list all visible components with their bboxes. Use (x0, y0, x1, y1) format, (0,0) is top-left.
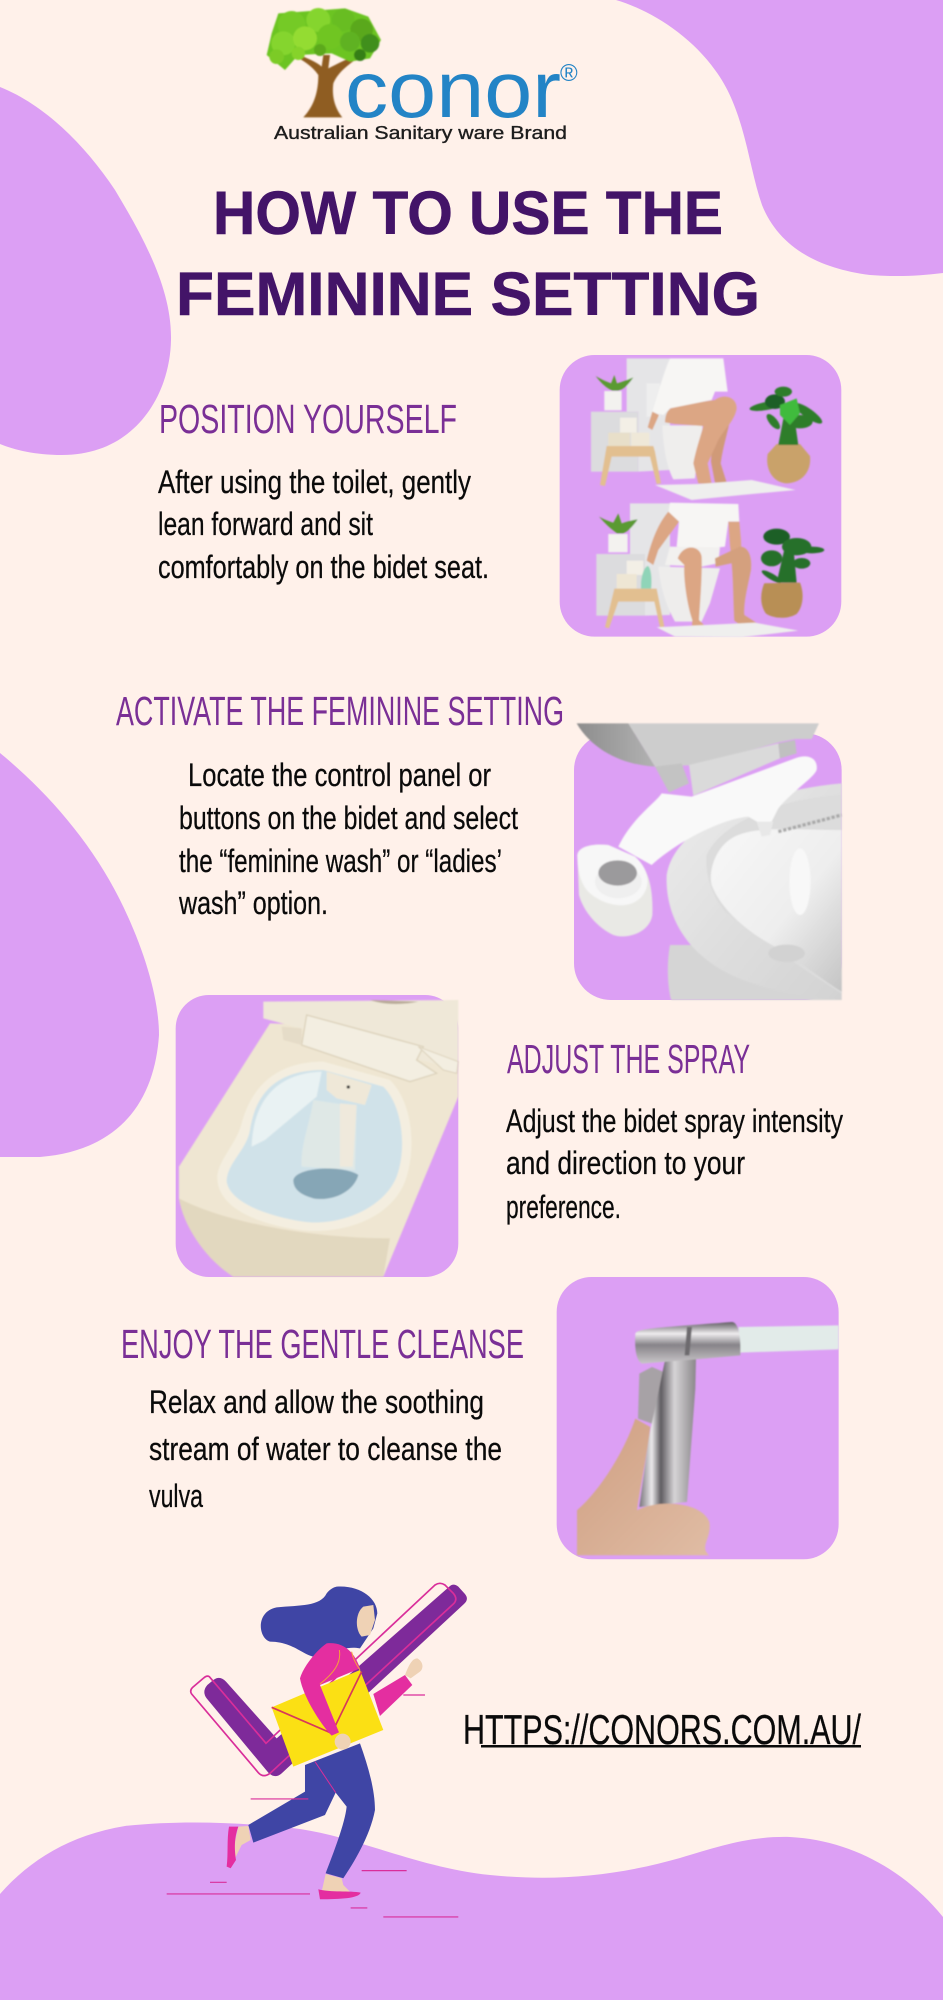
step 4 text: stream of water to cleanse the (149, 1431, 502, 1467)
face (357, 1605, 375, 1637)
toilet base (668, 945, 842, 1000)
toilet rim (667, 783, 842, 1000)
toilet inner wall (706, 795, 842, 993)
step 2 text: the “feminine wash” or “ladies’ (179, 843, 502, 879)
step 2 text: wash” option. (178, 885, 328, 921)
step 2 text: buttons on the bidet and select (179, 800, 518, 836)
step 3 heading: ADJUST THE SPRAY (507, 1036, 750, 1082)
lower scene (596, 503, 824, 637)
step 4 text: vulva (149, 1478, 203, 1514)
title: HOW TO USE THE (213, 179, 723, 247)
step 2 text (178, 757, 518, 921)
step 1 text (158, 464, 489, 585)
tagline: Australian Sanitary ware Brand (274, 122, 567, 143)
step 1 text: After using the toilet, gently (158, 464, 471, 500)
step 4 text: Relax and allow the soothing (149, 1384, 484, 1420)
registered mark: ® (560, 60, 578, 87)
title (176, 179, 760, 328)
hand (577, 1419, 710, 1555)
spray head (635, 1322, 741, 1364)
decorative blob: top right (616, 0, 943, 276)
decorative blob: upper left (0, 87, 171, 455)
title: FEMININE SETTING (176, 260, 760, 328)
step 3 text: Adjust the bidet spray intensity (506, 1103, 843, 1139)
far arm (373, 1675, 412, 1716)
toilet lid (628, 723, 819, 767)
checkmark outline (191, 1583, 456, 1776)
step 1 heading: POSITION YOURSELF (159, 396, 457, 442)
panel: toilet bowl spray photo (176, 995, 458, 1277)
step 2 text: Locate the control panel or (188, 757, 491, 793)
icon: tree (267, 8, 381, 117)
seat lid (263, 1000, 458, 1070)
toilet bowl (711, 829, 842, 992)
water stream (739, 1325, 839, 1353)
lever (638, 1367, 664, 1424)
handle (639, 1359, 696, 1507)
upper scene (591, 358, 825, 500)
spray (301, 1100, 357, 1170)
decorative blob: bottom wave (0, 1822, 943, 2000)
water bowl (227, 1070, 402, 1223)
step 4 text (149, 1384, 502, 1514)
step 3 text: and direction to your (506, 1145, 745, 1181)
step 3 text (506, 1103, 843, 1225)
panel: bidet attachment photo (574, 723, 842, 1000)
hair (261, 1587, 377, 1657)
feet and shoes (232, 1826, 251, 1858)
step 1 text: lean forward and sit (158, 506, 373, 542)
step 1 text: comfortably on the bidet seat. (158, 549, 489, 585)
ceramic body (179, 1023, 458, 1277)
panel: handheld sprayer photo (557, 1277, 839, 1559)
illustration: woman running with envelope (167, 1583, 467, 1917)
bidet arm (618, 756, 817, 865)
wordmark: conor (345, 45, 561, 134)
panel: person sitting on toilet photos (560, 355, 841, 637)
step 4 heading: ENJOY THE GENTLE CLEANSE (121, 1321, 524, 1367)
checkmark bar (204, 1585, 467, 1776)
decorative blob: middle left (0, 753, 159, 1157)
bowl rim (217, 1062, 412, 1231)
envelope (272, 1670, 383, 1767)
step 3 text: preference. (506, 1189, 621, 1225)
control box (577, 845, 652, 936)
step 2 heading: ACTIVATE THE FEMININE SETTING (116, 688, 564, 734)
hand (335, 1734, 351, 1750)
torso and near arm (300, 1643, 360, 1736)
nozzle (327, 1072, 372, 1105)
legs (248, 1743, 375, 1878)
logo: conor brand (267, 8, 578, 143)
speed lines (167, 1695, 458, 1917)
